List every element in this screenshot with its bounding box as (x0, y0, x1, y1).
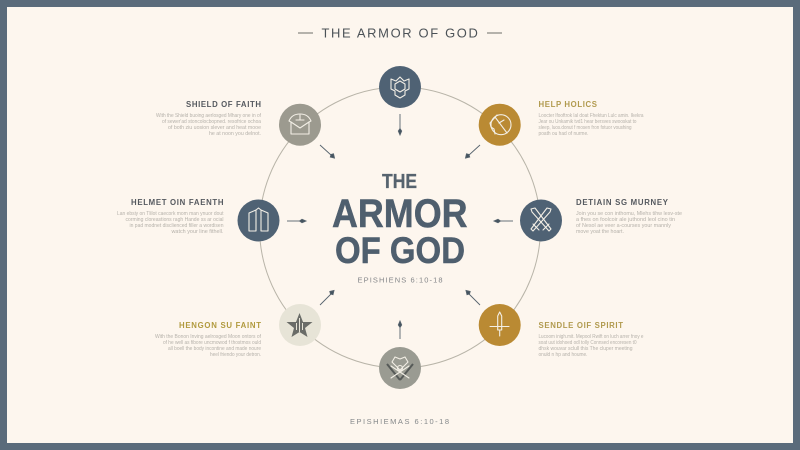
connecting ring (260, 87, 540, 368)
arrow: lower right (466, 290, 480, 305)
central title: THE (382, 171, 417, 193)
node: lower left star icon (279, 304, 321, 346)
panel: help holics: sleep, luos.donut f mosen fron fotuor voushing (538, 125, 632, 131)
node: right swords icon (520, 200, 562, 242)
panel: sendle oif spirit: SENDLE OIF SPIRIT (538, 321, 623, 330)
panel: detain sg murney: a fhes on foolcoir ale juthond leol cino tin (576, 217, 675, 223)
panel: hengon su faint: With the Bonon Inving aelrosged Moon ontors of (155, 334, 262, 340)
panel: shield of faith: of sewer'ad stoncolocbopned. resofrice ochoa (162, 119, 261, 125)
panel: help holics: HELP HOLICS (538, 100, 597, 109)
arrow: lower left (320, 290, 334, 305)
panel: hengon su faint: of he well as fibore uncmowod f thostmos ould (163, 340, 261, 346)
panel: helmet oin faenth: HELMET OIN FAENTH (131, 198, 224, 207)
central title: EPISHIENS 6:10-18 (358, 276, 442, 284)
arrow: right (494, 219, 513, 223)
panel: helmet oin faenth: watch your line fithell. (172, 229, 224, 235)
panel: detain sg murney: move yoat the hoart. (576, 229, 624, 235)
panel: help holics (538, 100, 644, 137)
node: left book icon (238, 200, 280, 242)
node: upper right icon (479, 104, 521, 146)
arrow: upper left (320, 145, 334, 158)
node: top shield icon (379, 66, 421, 108)
panel: help holics: Loocter lfooftrok lal doat Fhektun Lulc amin. Ikekra (538, 113, 644, 119)
panel: sendle oif spirit (538, 321, 644, 358)
panel: shield of faith: of both ziu uosion slever and heat mooe (168, 125, 261, 131)
panel: helmet oin faenth: corming cloreastions ragh Hande ss ar ocial (126, 217, 224, 223)
panel: hengon su faint: HENGON SU FAINT (179, 321, 261, 330)
panel: detain sg murney (576, 198, 682, 235)
panel: shield of faith: With the Shield buoing aerlosged Mhary one in of (156, 113, 262, 119)
central title: OF GOD (335, 229, 465, 271)
node: bottom crossed swords icon (379, 347, 421, 389)
arrow: bottom (398, 321, 402, 339)
panel: sendle oif spirit: soat uut idohoed odl tolly Connsed encoresen t0 (538, 340, 637, 346)
top heading: THE ARMOR OF GOD (322, 26, 480, 40)
panel: sendle oif spirit: onuld n hp and houme. (538, 352, 588, 358)
panel: detain sg murney: of Nesol ae veer a-courses your mannly (576, 223, 672, 229)
panel: hengon su faint: heel friendo your detron. (210, 352, 261, 358)
panel: shield of faith: he at noon you delnot. (209, 131, 261, 137)
node: upper left icon (279, 104, 321, 146)
panel: hengon su faint: all boell the body incontine and made noure (168, 346, 261, 352)
panel: sendle oif spirit: dhsk wouvar sclull this The cluper meeting (538, 346, 633, 352)
panel: helmet oin faenth: in pad modnet disclienced filler a wordisen (130, 223, 224, 229)
central title (332, 171, 468, 284)
panel: detain sg murney: Join you se con inthomu, Mlehs tihw lesv-ste (576, 211, 682, 217)
arrow: upper right (466, 145, 480, 158)
panel: shield of faith: SHIELD OF FAITH (186, 100, 261, 109)
panel: help holics: Jear ou Unkamik tvd1 hear bersves swooskat to (538, 119, 637, 125)
panel: sendle oif spirit: Lucoom inigh.mit. Mepool Rwift on luch arrer fnoy e (538, 334, 644, 340)
panel: help holics: poath ou had of nurme. (538, 131, 588, 137)
panel: hengon su faint (155, 321, 262, 358)
arrow: top (398, 114, 402, 135)
arrow: left (287, 219, 306, 223)
footer reference: EPISHIEMAS 6:10-18 (350, 417, 449, 426)
central title: ARMOR (332, 192, 468, 236)
panel: shield of faith (156, 100, 262, 137)
panel: helmet oin faenth (117, 198, 224, 235)
panel: helmet oin faenth: Lan ebsiy on Tlilot caecork mom man ynuor dout (117, 211, 224, 217)
panel: detain sg murney: DETIAIN SG MURNEY (576, 198, 669, 207)
node: lower right sword icon (479, 304, 521, 346)
